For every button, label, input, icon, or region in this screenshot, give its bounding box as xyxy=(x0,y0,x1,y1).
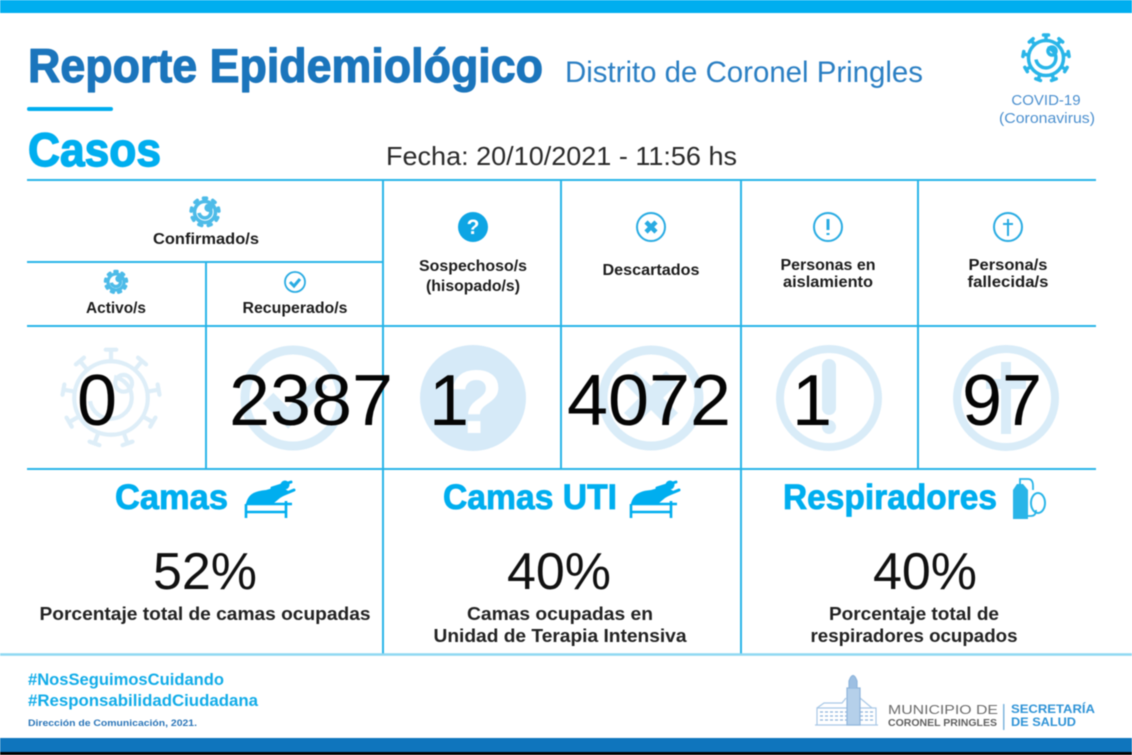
percentage: 40% xyxy=(507,543,611,601)
icon: oxygen tank xyxy=(1013,479,1045,519)
icon: check xyxy=(285,272,305,292)
panel: fallecidos header: Persona/s xyxy=(968,257,1048,274)
value: fallecidos: 97 xyxy=(962,361,1042,441)
icon: virus xyxy=(105,271,127,292)
panel: aislamiento header: Personas en xyxy=(780,257,876,274)
logo text: secretaría de salud: SECRETARÍA xyxy=(1011,701,1095,716)
icon: cross xyxy=(637,213,665,241)
icon: question: ? xyxy=(467,216,479,239)
value: recuperados: 2387 xyxy=(229,361,393,441)
description: Porcentaje total de camas ocupadas xyxy=(40,604,370,624)
panel: descartados header: Descartados xyxy=(602,262,700,279)
panel: camas UTI: Unidad de Terapia Intensiva xyxy=(434,626,688,646)
panel: sospechosos header: (hisopado/s) xyxy=(426,278,520,295)
heading: casos: Casos xyxy=(28,123,161,176)
footer hashtags xyxy=(28,670,259,710)
watermark: check xyxy=(245,350,341,446)
panel: camas UTI xyxy=(434,478,688,646)
footer hashtags: #ResponsabilidadCiudadana xyxy=(28,691,259,710)
watermark: cross xyxy=(603,350,699,446)
panel: recuperados header: Recuperado/s xyxy=(242,300,348,317)
top bar xyxy=(0,0,1132,13)
icon: virus xyxy=(1023,35,1069,80)
icon: exclamation xyxy=(814,213,842,241)
bottom bar xyxy=(0,738,1132,752)
logo text: municipio: MUNICIPIO DE xyxy=(888,702,998,717)
heading: Respiradores xyxy=(783,478,997,517)
panel: respiradores xyxy=(783,478,1045,646)
panel: aislamiento header xyxy=(780,213,876,291)
badge text: COVID-19 xyxy=(1011,92,1081,109)
icon: virus xyxy=(191,198,219,225)
panel: respiradores: respiradores ocupados xyxy=(810,626,1018,646)
logo divider xyxy=(1003,704,1004,730)
logo text: municipio: CORONEL PRINGLES xyxy=(888,718,997,729)
panel: camas xyxy=(40,478,370,624)
panel: activos header xyxy=(86,271,146,317)
subtitle: Distrito de Coronel Pringles xyxy=(565,56,923,89)
heading: Camas xyxy=(115,478,228,517)
panel: sospechosos header xyxy=(419,212,527,295)
description: Porcentaje total de xyxy=(829,604,999,624)
title: Reporte Epidemiológico xyxy=(28,39,543,92)
logo text: secretaría de salud xyxy=(1011,701,1095,729)
heading: Camas UTI xyxy=(443,478,617,517)
panel: activos header: Activo/s xyxy=(86,300,146,317)
panel: confirmados header xyxy=(153,198,259,248)
description: Camas ocupadas en xyxy=(467,604,653,624)
value: sospechosos: 1 xyxy=(429,361,469,441)
panel: recuperados header xyxy=(242,272,348,317)
footer credit: Dirección de Comunicación, 2021. xyxy=(28,718,197,729)
value: activos: 0 xyxy=(77,361,117,441)
date: Fecha: 20/10/2021 - 11:56 hs xyxy=(386,141,737,171)
logo: municipal building xyxy=(815,676,878,725)
percentage: 52% xyxy=(153,543,257,601)
watermark: question: ? xyxy=(449,353,503,453)
panel: fallecidos header: fallecida/s xyxy=(968,274,1048,291)
panel: descartados header xyxy=(602,213,700,279)
bottom edge xyxy=(0,752,1132,755)
panel: confirmados header: Confirmado/s xyxy=(153,231,259,248)
panel: sospechosos header: Sospechoso/s xyxy=(419,258,527,275)
watermark: exclamation xyxy=(780,349,878,447)
value: descartados: 4072 xyxy=(567,361,731,441)
title underline xyxy=(27,107,113,111)
percentage: 40% xyxy=(873,543,977,601)
icon: cross of death xyxy=(994,213,1022,241)
badge: COVID-19 xyxy=(999,35,1095,127)
watermark: virus xyxy=(63,350,159,445)
panel: aislamiento header: aislamiento xyxy=(783,274,873,291)
badge: COVID-19: (Coronavirus) xyxy=(999,110,1095,127)
value: aislamiento: 1 xyxy=(792,361,832,441)
watermark: question xyxy=(420,345,526,453)
panel: fallecidos header xyxy=(968,213,1048,291)
logo text: secretaría de salud: DE SALUD xyxy=(1011,715,1076,729)
watermark: cross of death xyxy=(957,349,1055,447)
logo text: municipio xyxy=(888,702,998,729)
footer hashtags: #NosSeguimosCuidando xyxy=(28,670,224,689)
icon: bed xyxy=(246,480,294,518)
icon: bed xyxy=(631,480,679,518)
